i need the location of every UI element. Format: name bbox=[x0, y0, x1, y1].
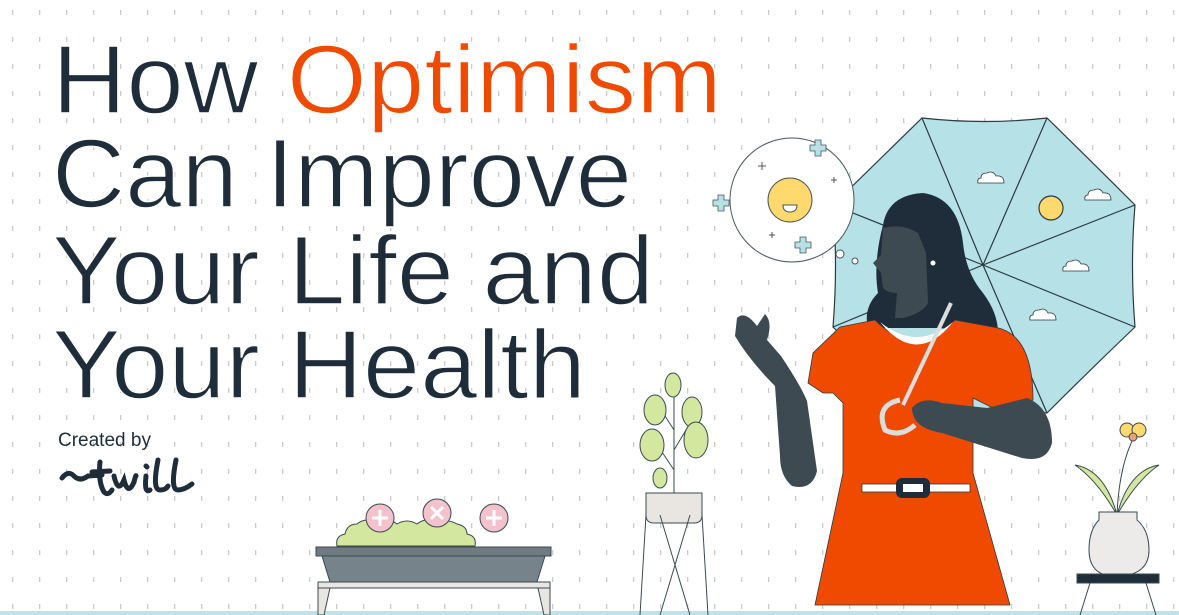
title bbox=[52, 25, 722, 419]
icon: clouds and sun on umbrella bbox=[978, 172, 1111, 320]
umbrella bbox=[833, 118, 1135, 413]
left arm bbox=[735, 314, 817, 487]
plant on stand bbox=[640, 373, 708, 615]
vase on side table bbox=[1075, 423, 1159, 615]
credit: created by twill: Created by bbox=[58, 430, 151, 451]
title: Your Health bbox=[52, 310, 586, 419]
thought bubble bbox=[713, 138, 858, 264]
title: How Optimism bbox=[52, 25, 722, 134]
hair bbox=[867, 193, 998, 333]
woman with umbrella bbox=[735, 193, 1052, 605]
face and neck bbox=[873, 226, 928, 318]
title: Can Improve bbox=[52, 119, 632, 228]
credit: created by twill bbox=[58, 430, 192, 494]
planter with flowers bbox=[316, 499, 551, 615]
right arm bbox=[912, 398, 1052, 459]
dress bbox=[808, 320, 1033, 605]
title: Your Life and bbox=[52, 216, 654, 325]
